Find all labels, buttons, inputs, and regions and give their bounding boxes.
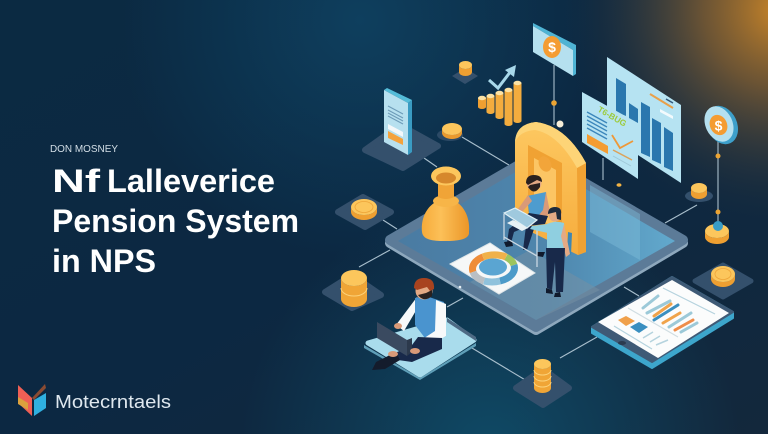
person: standing man	[530, 207, 570, 297]
icon: blue tile	[630, 322, 648, 333]
coin on tile	[685, 183, 713, 202]
person: seated man with table	[504, 175, 572, 267]
icon: gold vase	[422, 166, 469, 241]
panel: bar chart board	[607, 57, 681, 183]
icon: dollar sign board	[533, 23, 576, 76]
panel: pie chart sheet	[450, 243, 535, 294]
title: Pension System	[52, 203, 299, 239]
arch: gold monument	[515, 120, 586, 255]
panel: coin stack tile bottom	[516, 359, 569, 405]
logo	[18, 384, 171, 416]
panel: coin tile upper left	[338, 197, 391, 227]
coin node	[437, 123, 463, 141]
panel: report document: T6-BUG	[596, 104, 629, 129]
title: Lalleverice	[107, 163, 275, 199]
bar chart: coin columns	[478, 81, 522, 126]
panel: coin stack tile left	[325, 270, 381, 308]
small coin on tile	[452, 61, 478, 84]
icon: dollar sign board: $	[548, 39, 556, 55]
logo wordmark: Motecrntaels	[55, 392, 171, 412]
connector lines	[359, 65, 718, 381]
donut chart	[472, 255, 514, 282]
eyebrow text: DON MOSNEY	[50, 143, 118, 155]
coin with ball node	[705, 210, 729, 244]
title	[52, 163, 299, 279]
title: in NPS	[52, 243, 156, 279]
title: Nf	[52, 163, 100, 199]
icon: dollar coin badge	[699, 101, 744, 149]
icon: dollar coin badge: $	[715, 118, 723, 134]
coin on tile right	[695, 265, 751, 297]
connector node	[716, 154, 720, 158]
icon: orange tile	[618, 316, 635, 326]
panel: report tablet	[592, 277, 733, 368]
bar chart: report bars	[643, 296, 697, 332]
small dot	[616, 183, 622, 187]
icon: logo mark	[18, 384, 46, 416]
panel: phone	[365, 88, 438, 168]
person: man with laptop on platform	[364, 278, 476, 380]
icon: check arrow	[489, 65, 516, 88]
connector node	[551, 100, 557, 106]
panel: central tablet	[390, 155, 683, 330]
panel: report document	[582, 92, 638, 179]
